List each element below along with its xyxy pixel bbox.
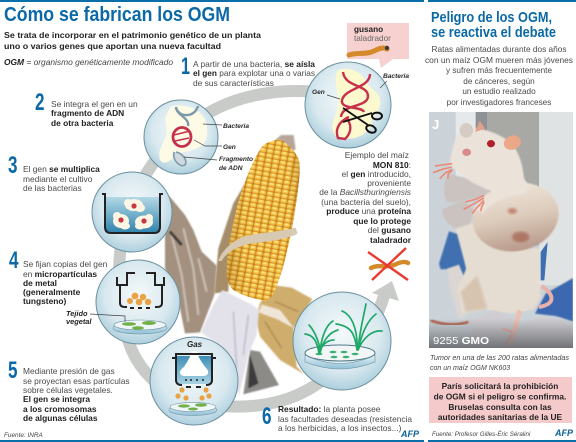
panel: step 4: Se fijan copias del gen bbox=[23, 259, 108, 269]
intro text: Se trata de incorporar en el patrimonio genético de un planta bbox=[4, 30, 261, 40]
circle: gene inserted in DNA: Fragmento bbox=[219, 156, 253, 163]
right panel summary: por investigadores franceses bbox=[447, 98, 551, 107]
blue sleeves bbox=[438, 230, 467, 276]
text: ejemplo del maíz MON 810: que lo protege bbox=[353, 216, 411, 226]
panel: step 5: Mediante presión de gas bbox=[23, 366, 115, 376]
panel: step 5: a los cromosomas bbox=[23, 404, 97, 414]
circle: resulting plants bbox=[293, 292, 391, 390]
panel: step 5: se proyectan esas partículas bbox=[23, 376, 130, 386]
silk tip bbox=[274, 135, 296, 154]
text: ejemplo del maíz MON 810: (una bacteria del suelo), bbox=[321, 197, 411, 207]
panel: step 1: A partir de una bacteria, se aísla bbox=[193, 59, 315, 69]
circle: gas gene gun bbox=[150, 337, 238, 425]
panel: step 1: el gen para explotar una o varias bbox=[193, 68, 315, 78]
circle: bacteria with cut gene bbox=[305, 62, 409, 148]
glove forearm bbox=[447, 265, 470, 319]
label: tejido vegetal: Tejido bbox=[66, 309, 88, 318]
panel: step 4: en micropartículas bbox=[23, 269, 97, 279]
bottom glove bbox=[560, 318, 564, 319]
panel: step 3: de las bacterias bbox=[23, 183, 82, 193]
text: ejemplo del maíz MON 810: produce una proteína bbox=[326, 206, 411, 216]
panel: step 6 bbox=[262, 403, 412, 433]
arm bbox=[474, 192, 525, 214]
circle: bacteria with cut gene: Bacteria bbox=[383, 73, 409, 80]
DNA helix bbox=[337, 72, 370, 139]
callout: París solicitará: autoridades sanitarias de la UE bbox=[438, 412, 563, 422]
paws bbox=[433, 164, 452, 179]
right panel summary: y sufren más frecuentemente bbox=[446, 66, 552, 75]
text: ejemplo del maíz MON 810: taladrador bbox=[370, 235, 412, 245]
circle: gene inserted in DNA bbox=[144, 100, 253, 174]
husk: tan right bbox=[256, 285, 312, 374]
panel: step 6: Resultado: la planta posee bbox=[278, 404, 381, 414]
red gene bbox=[173, 128, 191, 146]
right panel summary: de cánceres, según bbox=[463, 77, 535, 86]
circle: bacteria culture bbox=[92, 172, 172, 252]
husk strip bbox=[218, 228, 298, 261]
circle: gene inserted in DNA: Gen bbox=[223, 144, 236, 151]
panel: step 2: Se integra el gen en un bbox=[51, 99, 138, 109]
text: ejemplo del maíz MON 810: proveniente bbox=[367, 178, 411, 188]
kernels bbox=[226, 140, 300, 300]
right panel summary: Ratas alimentadas durante dos años bbox=[432, 45, 566, 54]
text: ejemplo del maíz MON 810: del gusano bbox=[368, 225, 411, 235]
petri dish bbox=[113, 320, 167, 334]
right panel summary: un estudio realizado bbox=[462, 87, 536, 96]
panel: step 4: 4 bbox=[9, 247, 19, 274]
text: ejemplo del maíz MON 810: el gen introducido, bbox=[342, 169, 411, 179]
photo: rat with tumour bbox=[429, 112, 573, 349]
husk: dark base bbox=[243, 350, 279, 394]
callout: gusano taladrador: taladrador bbox=[354, 34, 391, 43]
bottom rule, left panel bbox=[0, 440, 424, 442]
panel: step 5: sobre células vegetales. bbox=[23, 385, 113, 395]
panel: step 2: fragmento de ADN bbox=[51, 108, 124, 118]
photo marks: J bbox=[432, 117, 439, 132]
icon: scissors bbox=[343, 108, 382, 134]
photo marks: 9255 GMO bbox=[433, 336, 489, 347]
right panel title: se reactiva el debate bbox=[431, 24, 556, 41]
rat lower body bbox=[456, 222, 540, 314]
panel: step 3: El gen se multiplica bbox=[23, 164, 100, 174]
eye and nose bbox=[487, 140, 495, 147]
bottom shade bbox=[429, 319, 573, 349]
circle: gas gene gun: Gas bbox=[187, 340, 203, 349]
panel: step 5: 5 bbox=[8, 357, 18, 384]
right panel summary bbox=[425, 45, 573, 107]
icon: worm bbox=[349, 46, 389, 55]
husk: left brown leaves bbox=[165, 195, 217, 333]
callout: París solicitará: Bruselas consulta con las bbox=[448, 402, 552, 412]
circle: gene inserted in DNA: de ADN bbox=[219, 165, 243, 172]
photo marks bbox=[432, 117, 489, 347]
label: tejido vegetal: vegetal bbox=[66, 317, 92, 326]
top rule, right panel bbox=[428, 0, 576, 2]
panel: step 6: las facultades deseadas (resistencia bbox=[278, 414, 412, 424]
plants bbox=[305, 304, 382, 353]
corn cob with husks bbox=[165, 135, 312, 396]
panel: step 4: (generalmente bbox=[23, 287, 81, 297]
text: ejemplo del maíz MON 810: de la Bacillsthuringiensis bbox=[319, 187, 412, 197]
tumour bbox=[472, 182, 560, 252]
source: right panel: Fuente: Profesor Gilles-Éric Séralini bbox=[432, 431, 531, 438]
intro text bbox=[4, 30, 261, 51]
callout: París solicitará bbox=[429, 377, 572, 423]
right panel summary: con un maíz OGM mueren más jóvenes bbox=[425, 56, 573, 65]
text: ejemplo del maíz MON 810: Ejemplo del maíz bbox=[345, 150, 409, 160]
icon: crossed-out worm bbox=[368, 248, 408, 280]
panel: step 4: tungsteno) bbox=[23, 296, 66, 306]
right panel title bbox=[431, 9, 556, 41]
panel: step 1: de sus características bbox=[193, 78, 274, 88]
panel: step 2: 2 bbox=[35, 89, 44, 116]
callout: gusano taladrador bbox=[347, 23, 409, 68]
panel: step 5: de algunas células bbox=[23, 413, 98, 423]
panel: step 3: 3 bbox=[8, 152, 18, 179]
panel: step 6: a los herbicidas, a los insectos...) bbox=[278, 423, 402, 433]
bottom rule, right panel bbox=[428, 440, 576, 442]
panel: step 2 bbox=[35, 89, 138, 128]
intro text: uno o varios genes que aportan una nueva facultad bbox=[4, 41, 221, 51]
callout: París solicitará: París solicitará la prohibición bbox=[442, 381, 558, 391]
source: left panel: Fuente: INRA bbox=[4, 432, 43, 439]
husk: white sheath bbox=[201, 290, 259, 396]
ears bbox=[460, 123, 473, 138]
glove fingers bbox=[444, 174, 490, 203]
photo caption bbox=[430, 355, 570, 372]
panel: step 5: El gen se integra bbox=[23, 394, 90, 404]
label: tejido vegetal bbox=[66, 309, 92, 326]
husk: behind cob bbox=[214, 163, 257, 293]
logo: AFP right: AFP bbox=[554, 428, 574, 438]
circular process arrow bbox=[119, 91, 399, 407]
panel: step 1 bbox=[181, 53, 315, 88]
panel: step 1: 1 bbox=[181, 53, 190, 80]
circle: bacteria with cut gene: Gen bbox=[312, 89, 325, 96]
definition of OGM: OGM = organismo genéticamente modificado bbox=[4, 58, 174, 67]
title: Cómo se fabrican los OGM bbox=[4, 4, 230, 26]
circle: gene inserted in DNA: Bacteria bbox=[223, 123, 249, 130]
logo: AFP left: AFP bbox=[400, 429, 420, 439]
text: ejemplo del maíz MON 810 bbox=[319, 150, 412, 245]
panel: step 4 bbox=[9, 247, 108, 306]
panel: step 4: de metal bbox=[23, 278, 57, 288]
rat tails and feet bbox=[539, 286, 551, 307]
panel: step 6: 6 bbox=[262, 403, 272, 430]
panel: step 3: mediante el cultivo bbox=[23, 174, 93, 184]
photo caption: Tumor en una de las 200 ratas alimentadas bbox=[430, 355, 570, 362]
panel: step 3 bbox=[8, 152, 100, 193]
circle: microparticles and plant tissue bbox=[90, 260, 180, 344]
right panel title: Peligro de los OGM, bbox=[431, 9, 552, 26]
rat head and shoulders bbox=[450, 128, 529, 194]
top rule, left panel bbox=[0, 0, 424, 2]
callout: París solicitará: de OGM si el peligro se confirma. bbox=[434, 392, 566, 402]
callout: gusano taladrador: gusano bbox=[354, 25, 383, 34]
text: ejemplo del maíz MON 810: MON 810: bbox=[373, 160, 411, 170]
background bbox=[429, 112, 573, 349]
panel: step 2: de otra bacteria bbox=[51, 118, 114, 128]
panel: step 5 bbox=[8, 357, 130, 423]
photo caption: con un maíz OGM NK603 bbox=[430, 365, 510, 372]
